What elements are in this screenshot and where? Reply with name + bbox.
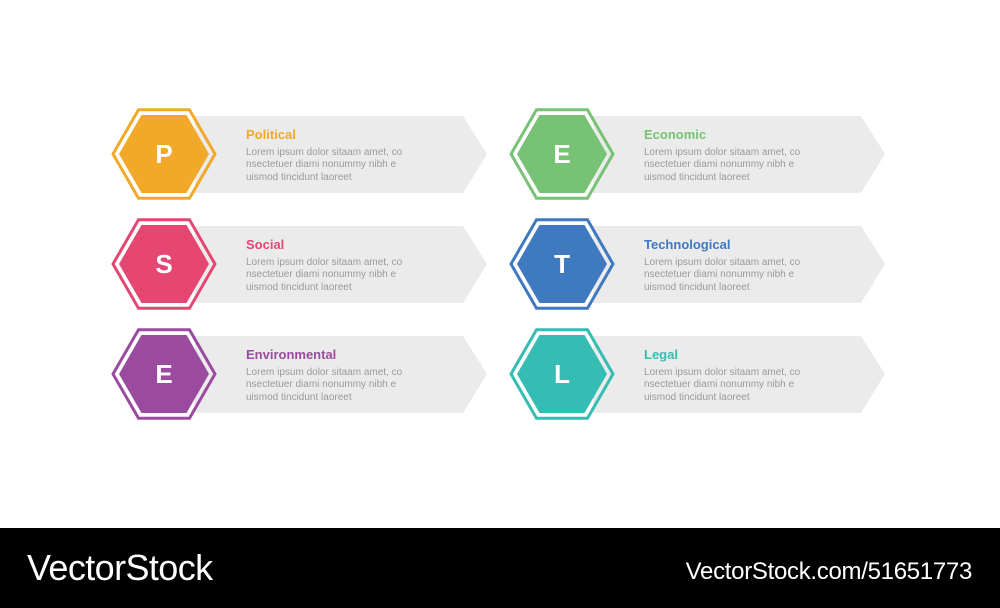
panel: Political: Lorem ipsum dolor sitaam amet, co <box>246 147 403 158</box>
icon: P hexagon: P <box>155 139 173 169</box>
panel: Legal: Lorem ipsum dolor sitaam amet, co <box>644 367 801 378</box>
panel: Political: nsectetuer diami nonummy nibh e <box>246 159 397 170</box>
panel: Environmental: nsectetuer diami nonummy nibh e <box>246 379 397 390</box>
panel: Environmental: Lorem ipsum dolor sitaam amet, co <box>246 367 403 378</box>
panel: Political: Political <box>246 127 296 142</box>
panel: Environmental: Environmental <box>246 347 336 362</box>
icon: E hexagon <box>113 330 215 418</box>
panel: Economic: Lorem ipsum dolor sitaam amet, co <box>644 147 801 158</box>
panel: Social: uismod tincidunt laoreet <box>246 282 352 293</box>
icon: T hexagon: T <box>554 249 570 279</box>
panel: Economic: uismod tincidunt laoreet <box>644 172 750 183</box>
footer bar: VectorStock.com/51651773 <box>686 558 972 585</box>
panel: Economic: nsectetuer diami nonummy nibh e <box>644 159 795 170</box>
panel: Political: uismod tincidunt laoreet <box>246 172 352 183</box>
icon: S hexagon <box>113 220 215 308</box>
icon: T hexagon <box>511 220 613 308</box>
icon: E hexagon: E <box>155 359 173 389</box>
panel: Legal <box>511 330 885 418</box>
panel: Legal: nsectetuer diami nonummy nibh e <box>644 379 795 390</box>
icon: E hexagon <box>511 110 613 198</box>
panel: Economic: Economic <box>644 127 706 142</box>
panel: Political <box>113 110 487 198</box>
panel: Legal: uismod tincidunt laoreet <box>644 392 750 403</box>
icon: S hexagon: S <box>155 249 173 279</box>
icon: P hexagon <box>113 110 215 198</box>
footer bar <box>0 528 1000 608</box>
panel: Technological: Lorem ipsum dolor sitaam amet, co <box>644 257 801 268</box>
panel: Social: Social <box>246 237 284 252</box>
panel: Environmental: uismod tincidunt laoreet <box>246 392 352 403</box>
icon: E hexagon: E <box>553 139 571 169</box>
panel: Legal: Legal <box>644 347 678 362</box>
panel: Economic <box>511 110 885 198</box>
icon: L hexagon <box>511 330 613 418</box>
panel: Technological: Technological <box>644 237 730 252</box>
panel: Environmental <box>113 330 487 418</box>
panel: Social <box>113 220 487 308</box>
icon: L hexagon: L <box>554 359 570 389</box>
panel: Technological <box>511 220 885 308</box>
panel: Social: nsectetuer diami nonummy nibh e <box>246 269 397 280</box>
panel: Social: Lorem ipsum dolor sitaam amet, co <box>246 257 403 268</box>
footer bar: VectorStock <box>27 547 214 588</box>
panel: Technological: nsectetuer diami nonummy nibh e <box>644 269 795 280</box>
panel: Technological: uismod tincidunt laoreet <box>644 282 750 293</box>
